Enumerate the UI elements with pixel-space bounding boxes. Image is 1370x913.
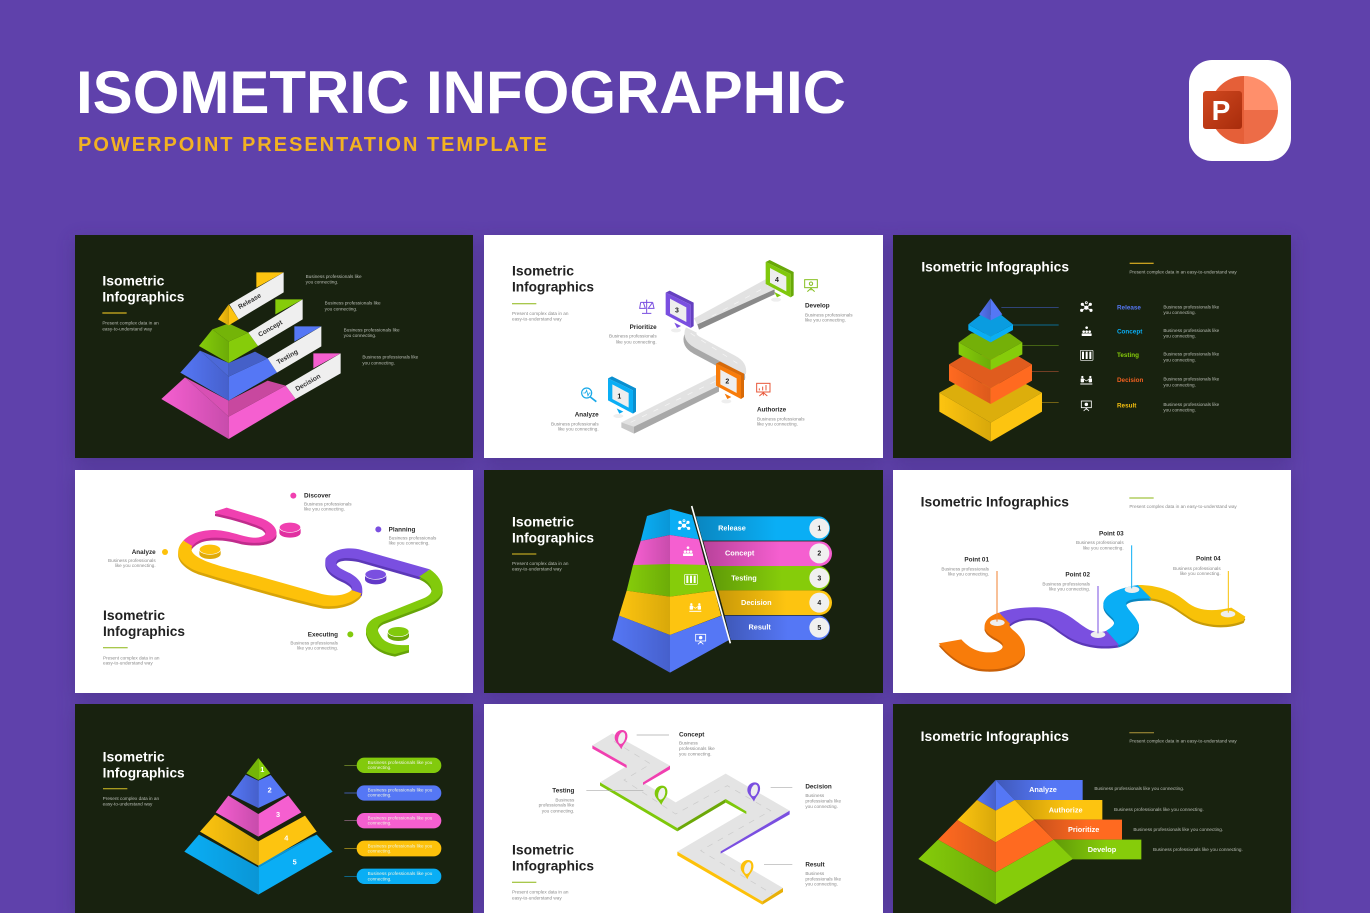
panel: slide 1 stepped pyramid with ribbons <box>75 235 473 458</box>
pills: Business professionals like you <box>368 871 432 876</box>
labels: like you connecting. <box>805 318 846 323</box>
step bars: Analyze <box>1029 785 1057 794</box>
labels: Analyze <box>575 412 599 419</box>
labels: Business professionals <box>941 566 989 571</box>
heading: Isometric Infographics <box>921 728 1069 744</box>
labels: Point 01 <box>964 556 989 563</box>
labels: you connecting. <box>1163 358 1196 363</box>
labels: Concept <box>1117 328 1143 335</box>
labels: professionals like <box>539 803 575 808</box>
pin 2: 2 <box>725 379 729 386</box>
heading: Isometric <box>512 263 574 279</box>
labels: Business professionals like <box>1163 352 1219 357</box>
labels: Business professionals <box>757 416 805 421</box>
heading: Isometric <box>103 607 165 623</box>
labels: Decision <box>1117 377 1144 384</box>
labels: Point 04 <box>1196 556 1221 563</box>
labels: you connecting. <box>805 882 838 887</box>
descriptions: Business professionals like <box>344 327 400 332</box>
labels: Business professionals <box>1042 581 1090 586</box>
labels: Concept <box>679 731 705 738</box>
labels: Authorize <box>757 407 787 414</box>
labels: Testing <box>1117 352 1139 359</box>
intro text: Present complex data in an <box>103 796 160 801</box>
labels <box>941 530 1221 592</box>
labels: you connecting. <box>1163 408 1196 413</box>
labels: Business professionals <box>290 640 338 645</box>
descriptions: Business professionals like you connecting. <box>1133 827 1223 832</box>
heading: Infographics <box>103 623 185 639</box>
labels: you connecting. <box>1163 382 1196 387</box>
pills: Business professionals like you <box>368 843 432 848</box>
labels: professionals like <box>805 876 841 881</box>
descriptions: you connecting. <box>325 306 357 311</box>
heading: Infographics <box>512 279 594 295</box>
prism <box>612 509 729 673</box>
descriptions: Business professionals like <box>306 274 362 279</box>
descriptions: Business professionals like <box>362 355 418 360</box>
panel: slide 8 zigzag road <box>484 704 883 913</box>
arrows <box>586 735 792 865</box>
labels: you connecting. <box>1163 334 1196 339</box>
labels: Executing <box>308 631 338 638</box>
intro text: Present complex data in an easy-to-understand way <box>1129 269 1237 274</box>
labels: Decision <box>805 783 832 790</box>
descriptions: you connecting. <box>344 333 376 338</box>
bars: 1 <box>817 526 821 533</box>
connector lines <box>1001 308 1059 402</box>
icons <box>678 520 706 644</box>
intro text: Present complex data in an easy-to-understand way <box>1129 739 1237 744</box>
labels: like you connecting. <box>389 541 430 546</box>
bars: 2 <box>817 551 821 558</box>
labels: like you connecting. <box>1180 571 1221 576</box>
road <box>592 733 790 905</box>
pills: connecting. <box>368 765 391 770</box>
step bars <box>996 780 1141 859</box>
labels: like you connecting. <box>297 646 338 651</box>
bars <box>696 516 832 640</box>
subtitle: POWERPOINT PRESENTATION TEMPLATE <box>78 134 547 156</box>
labels: Business <box>805 871 824 876</box>
labels: Business professionals like <box>1163 304 1219 309</box>
labels: Point 03 <box>1099 530 1124 537</box>
ribbons: Decision <box>294 373 322 393</box>
labels: like you connecting. <box>115 563 156 568</box>
intro text: Present complex data in an <box>103 655 160 660</box>
pills: connecting. <box>368 876 391 881</box>
bars: 5 <box>817 625 821 632</box>
divider line <box>692 506 730 643</box>
panel: slide 5 prism with bars <box>484 470 883 693</box>
pills <box>344 758 441 884</box>
intro text: easy-to-understand way <box>512 317 562 322</box>
bars: Result <box>748 623 771 632</box>
labels <box>539 731 841 887</box>
heading: Isometric Infographics <box>921 494 1069 510</box>
intro text: Present complex data in an <box>512 311 569 316</box>
icons <box>1080 302 1093 411</box>
slide shadows <box>75 240 1291 913</box>
labels: Release <box>1117 304 1141 311</box>
road <box>621 278 775 434</box>
pills: Business professionals like you <box>368 815 432 820</box>
labels: like you connecting. <box>948 571 989 576</box>
descriptions <box>1094 786 1243 852</box>
labels: Business professionals <box>108 558 156 563</box>
labels: Prioritize <box>630 324 657 331</box>
labels: Business professionals like <box>1163 376 1219 381</box>
labels: Business professionals <box>389 535 436 540</box>
panel: slide 6 winding ribbon <box>893 470 1291 693</box>
main title: ISOMETRIC INFOGRAPHIC <box>76 59 846 126</box>
intro text: Present complex data in an <box>512 890 569 895</box>
pyramid: 2 <box>268 786 272 795</box>
labels: Testing <box>552 787 574 794</box>
panel: slide 7 numbered pyramid with pills <box>75 704 473 913</box>
heading: Isometric Infographics <box>921 259 1069 275</box>
pin 4 <box>766 260 794 302</box>
pyramid: 5 <box>293 858 297 867</box>
labels: you connecting. <box>542 808 574 813</box>
labels: like you connecting. <box>304 507 345 512</box>
stacked blocks <box>939 298 1042 442</box>
pin 3: 3 <box>675 308 679 315</box>
bars: Release <box>718 524 746 533</box>
labels <box>551 302 853 432</box>
labels: Planning <box>389 527 416 534</box>
labels: Business <box>679 741 698 746</box>
panel: slide 3 stacked blocks <box>893 235 1291 458</box>
pills: connecting. <box>368 793 391 798</box>
pills: Business professionals like you <box>368 760 432 765</box>
pin 1: 1 <box>617 393 621 400</box>
intro text: easy-to-understand way <box>512 567 562 572</box>
labels: Business professionals <box>304 502 352 507</box>
intro text: Present complex data in an easy-to-understand way <box>1129 504 1237 509</box>
labels: Business professionals <box>805 312 853 317</box>
labels: Business professionals <box>1076 540 1124 545</box>
heading: Infographics <box>512 858 594 874</box>
step bars: Authorize <box>1049 805 1083 814</box>
bars: Concept <box>725 549 755 558</box>
ribbon <box>178 508 443 657</box>
heading: Isometric <box>102 273 165 289</box>
labels: Point 02 <box>1065 571 1090 578</box>
panel: slide 4 ribbon path <box>75 470 473 693</box>
intro text: easy-to-understand way <box>102 326 153 331</box>
icon: presentation board <box>805 280 817 292</box>
labels: Result <box>805 861 826 868</box>
labels: you connecting. <box>805 804 838 809</box>
labels: like you connecting. <box>1049 587 1090 592</box>
labels: like you connecting. <box>757 422 798 427</box>
step bars: Prioritize <box>1068 825 1099 834</box>
labels: Result <box>1117 402 1137 409</box>
panel: slide 9 pyramid with steps <box>893 704 1291 913</box>
labels: like you connecting. <box>558 427 599 432</box>
pills: connecting. <box>368 821 391 826</box>
icon: magnifier <box>582 388 596 402</box>
labels: Business professionals <box>1173 566 1221 571</box>
pin 3 <box>666 291 694 332</box>
labels: Analyze <box>132 549 156 556</box>
map pins <box>615 730 760 879</box>
pyramid <box>918 780 1073 904</box>
icon: PowerPoint logo: P <box>1212 95 1230 126</box>
labels: you connecting. <box>679 751 712 756</box>
icon: PowerPoint logo <box>1189 60 1291 161</box>
heading: Isometric <box>103 748 165 764</box>
labels: Business <box>555 798 574 803</box>
pyramid: 1 <box>260 765 264 774</box>
descriptions: you connecting. <box>306 280 338 285</box>
bars: 4 <box>817 600 821 607</box>
icon: chart board <box>757 383 770 396</box>
intro text: Present complex data in an <box>102 321 159 326</box>
intro text: easy-to-understand way <box>512 895 562 900</box>
pyramid <box>161 304 296 439</box>
ribbons: Testing <box>276 349 299 366</box>
heading: Infographics <box>512 530 594 546</box>
icon: scales <box>640 300 654 313</box>
intro text: Present complex data in an <box>512 561 569 566</box>
labels: like you connecting. <box>616 339 657 344</box>
labels: like you connecting. <box>1083 545 1124 550</box>
pin 4: 4 <box>775 277 779 284</box>
descriptions <box>306 274 419 365</box>
labels: Business professionals <box>551 422 599 427</box>
bars: Testing <box>731 573 757 582</box>
bars: 3 <box>817 575 821 582</box>
descriptions: Business professionals like you connecting. <box>1114 807 1204 812</box>
descriptions: Business professionals like you connecting. <box>1153 847 1243 852</box>
labels: you connecting. <box>1163 310 1196 315</box>
pyramid: 3 <box>276 810 280 819</box>
labels: professionals like <box>679 746 715 751</box>
pyramid: 4 <box>284 834 289 843</box>
bars: Decision <box>741 598 772 607</box>
marker discs and stems <box>990 545 1235 638</box>
pills: connecting. <box>368 848 391 853</box>
labels: professionals like <box>805 798 841 803</box>
labels: Discover <box>304 493 331 500</box>
labels: Business <box>805 793 824 798</box>
descriptions: Business professionals like you connecting. <box>1094 786 1184 791</box>
heading: Isometric <box>512 514 574 530</box>
pills: Business professionals like you <box>368 788 432 793</box>
heading: Isometric <box>512 842 574 858</box>
pin 2 <box>716 362 744 403</box>
labels: Develop <box>805 302 830 309</box>
intro text: easy-to-understand way <box>103 802 153 807</box>
labels <box>108 493 437 651</box>
ribbons: Release <box>237 292 263 311</box>
marker discs <box>199 522 409 641</box>
heading: Infographics <box>103 764 185 780</box>
intro text: easy-to-understand way <box>103 661 153 666</box>
ribbons <box>229 272 341 399</box>
labels: Business professionals <box>609 334 657 339</box>
panel: slide 2 isometric road with pins <box>484 235 883 458</box>
labels <box>1117 304 1220 413</box>
heading: Infographics <box>102 289 185 305</box>
pyramid <box>184 758 333 895</box>
step bars: Develop <box>1088 845 1117 854</box>
descriptions: Business professionals like <box>325 301 381 306</box>
labels: Business professionals like <box>1163 328 1219 333</box>
descriptions: you connecting. <box>362 360 395 365</box>
labels: Business professionals like <box>1163 402 1219 407</box>
ribbon <box>939 585 1245 672</box>
ribbons: Concept <box>257 319 285 339</box>
pin 1 <box>608 376 636 418</box>
